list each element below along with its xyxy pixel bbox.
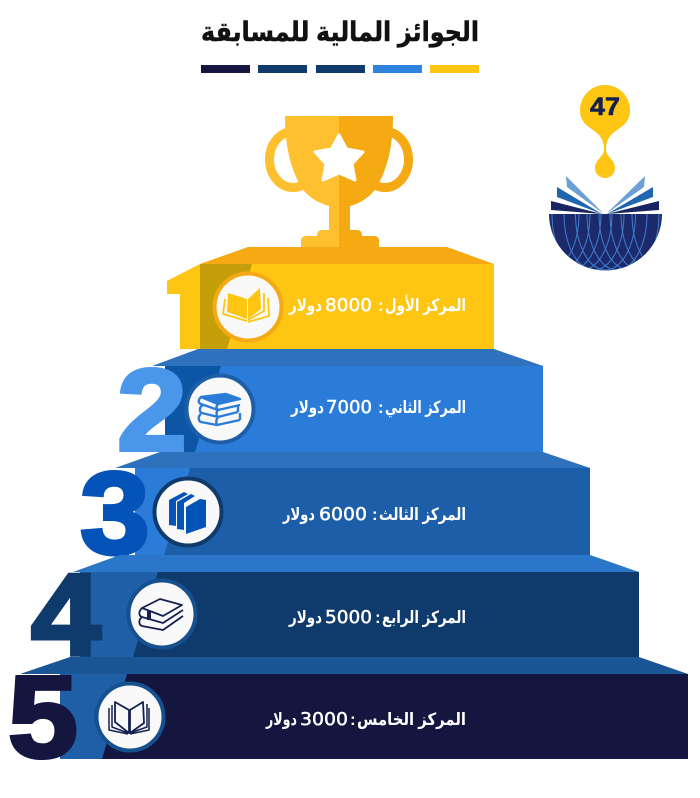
label: 6000 bbox=[319, 504, 367, 525]
label: دولار bbox=[288, 608, 322, 628]
medallion: upright books bbox=[154, 478, 222, 546]
label: المركز الرابع bbox=[382, 608, 466, 628]
icon: trophy bbox=[270, 116, 408, 247]
medallion: open book bbox=[214, 274, 282, 340]
digit 1: 1 bbox=[148, 244, 212, 374]
label: دولار bbox=[265, 710, 297, 730]
label: المركز الثاني bbox=[385, 398, 466, 418]
title colour bars bbox=[201, 65, 479, 73]
label: : bbox=[378, 296, 384, 315]
label: 3000 bbox=[300, 709, 348, 730]
logo: number drop and open book bbox=[549, 85, 662, 270]
label bbox=[290, 397, 466, 418]
icon: yellow drop with number bbox=[580, 85, 630, 178]
icon: yellow drop with number: 47 bbox=[590, 93, 620, 121]
digit 4: 4 bbox=[31, 550, 101, 680]
panel: second place step bbox=[117, 345, 543, 475]
panel: fourth place step bbox=[31, 550, 639, 680]
title: الجوائز المالية للمسابقة bbox=[201, 17, 479, 48]
panel: fifth place step bbox=[8, 652, 688, 782]
digit 2: 2 bbox=[117, 345, 187, 475]
label: دولار bbox=[282, 505, 315, 525]
label: 7000 bbox=[326, 397, 372, 418]
label: المركز الأول bbox=[385, 295, 466, 316]
label: المركز الثالث bbox=[379, 505, 466, 525]
label bbox=[265, 709, 466, 730]
label: 8000 bbox=[325, 295, 372, 316]
label: 5000 bbox=[325, 607, 372, 628]
panel: third place step bbox=[80, 448, 590, 578]
icon: lattice bowl bbox=[549, 214, 662, 270]
label: : bbox=[372, 505, 378, 524]
label: : bbox=[375, 608, 381, 627]
label bbox=[288, 295, 466, 316]
icon: book pages bbox=[551, 176, 659, 214]
label: المركز الخامس bbox=[357, 710, 466, 730]
label: دولار bbox=[288, 296, 322, 316]
panel: first place step bbox=[167, 247, 494, 349]
medallion: lying books bbox=[128, 580, 196, 648]
label bbox=[282, 504, 466, 525]
label bbox=[288, 607, 466, 628]
digit 5: 5 bbox=[8, 652, 78, 782]
label: دولار bbox=[290, 398, 324, 418]
label: : bbox=[350, 710, 356, 729]
label: : bbox=[378, 398, 384, 417]
digit 3: 3 bbox=[80, 448, 150, 578]
medallion: outlined open book bbox=[96, 684, 164, 750]
medallion: book stack bbox=[186, 376, 254, 442]
